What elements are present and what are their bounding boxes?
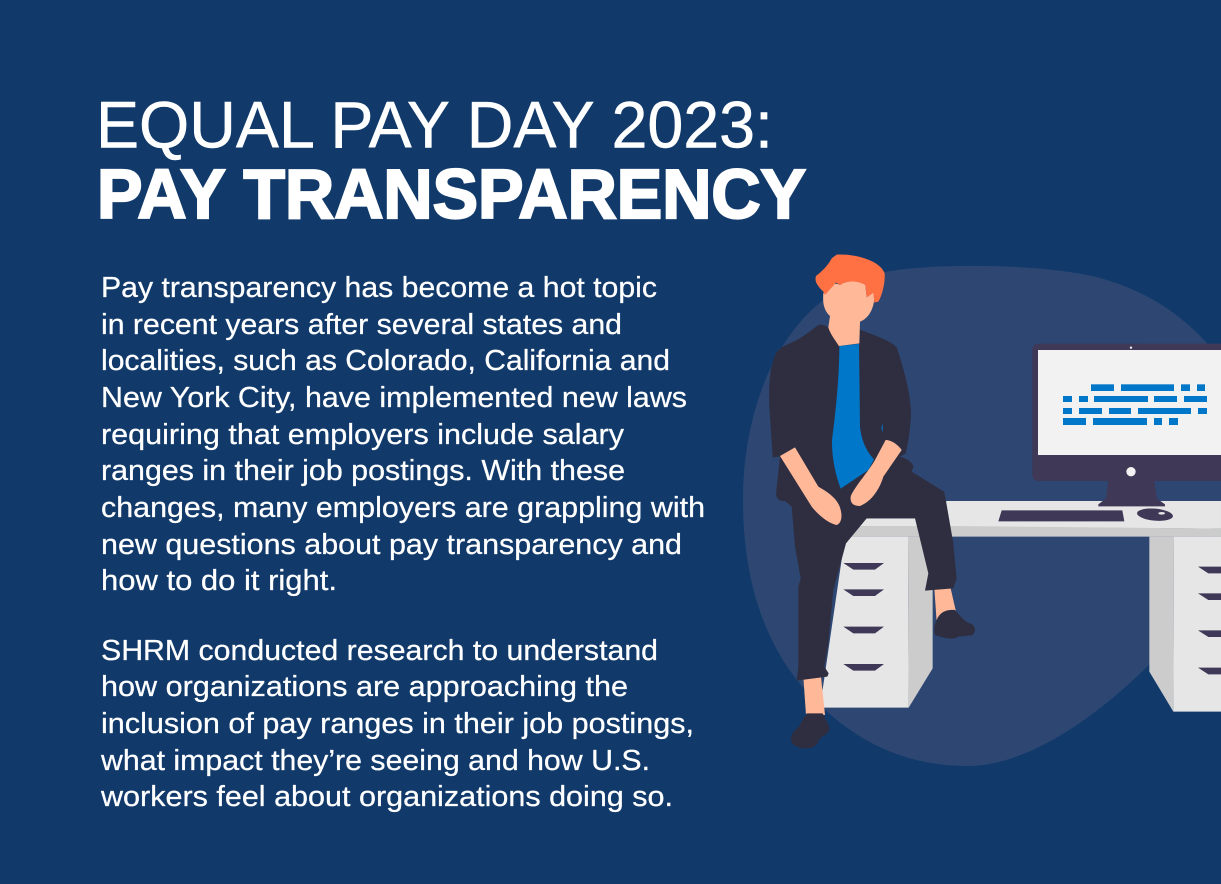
illustration: person at desk [769,254,1221,748]
illustration background blob [743,266,1221,766]
text block: intro paragraph: how to do it right. [101,565,337,597]
person [769,254,975,748]
shoes [791,713,829,748]
text block: research paragraph [100,635,694,813]
text block: intro paragraph: new questions about pay transparency and [101,529,682,561]
t-shirt [832,344,874,489]
text block: intro paragraph [101,272,705,597]
jacket [769,325,957,681]
text block: research paragraph: how organizations are approaching the [101,671,628,703]
text block: intro paragraph: in recent years after several states and [101,309,622,341]
text block: research paragraph: inclusion of pay ranges in their job postings, [101,708,694,740]
text block: research paragraph: workers feel about organizations doing so. [100,781,673,813]
keyboard [998,510,1124,521]
title: EQUAL PAY DAY 2023: [96,88,773,162]
hair [816,254,885,303]
desk [820,501,1221,712]
title [96,88,806,233]
text block: intro paragraph: New York City, have implemented new laws [101,382,687,414]
text block: intro paragraph: localities, such as Colorado, California and [101,345,670,377]
mouse [1137,507,1173,522]
on-screen text bars [1063,384,1207,425]
text block: intro paragraph: Pay transparency has become a hot topic [101,272,657,304]
text block: intro paragraph: requiring that employers include salary [101,419,625,451]
text block: research paragraph: SHRM conducted research to understand [101,635,658,667]
text block: intro paragraph: ranges in their job postings. With these [101,455,625,487]
drawer handles [843,563,1221,674]
title: PAY TRANSPARENCY [97,155,806,233]
legs skin [803,677,825,715]
computer monitor [1032,344,1221,506]
neck and face [823,281,874,346]
text block: intro paragraph: changes, many employers are grappling with [101,492,705,524]
text block: research paragraph: what impact they’re seeing and how U.S. [100,745,650,777]
arms [780,447,841,525]
